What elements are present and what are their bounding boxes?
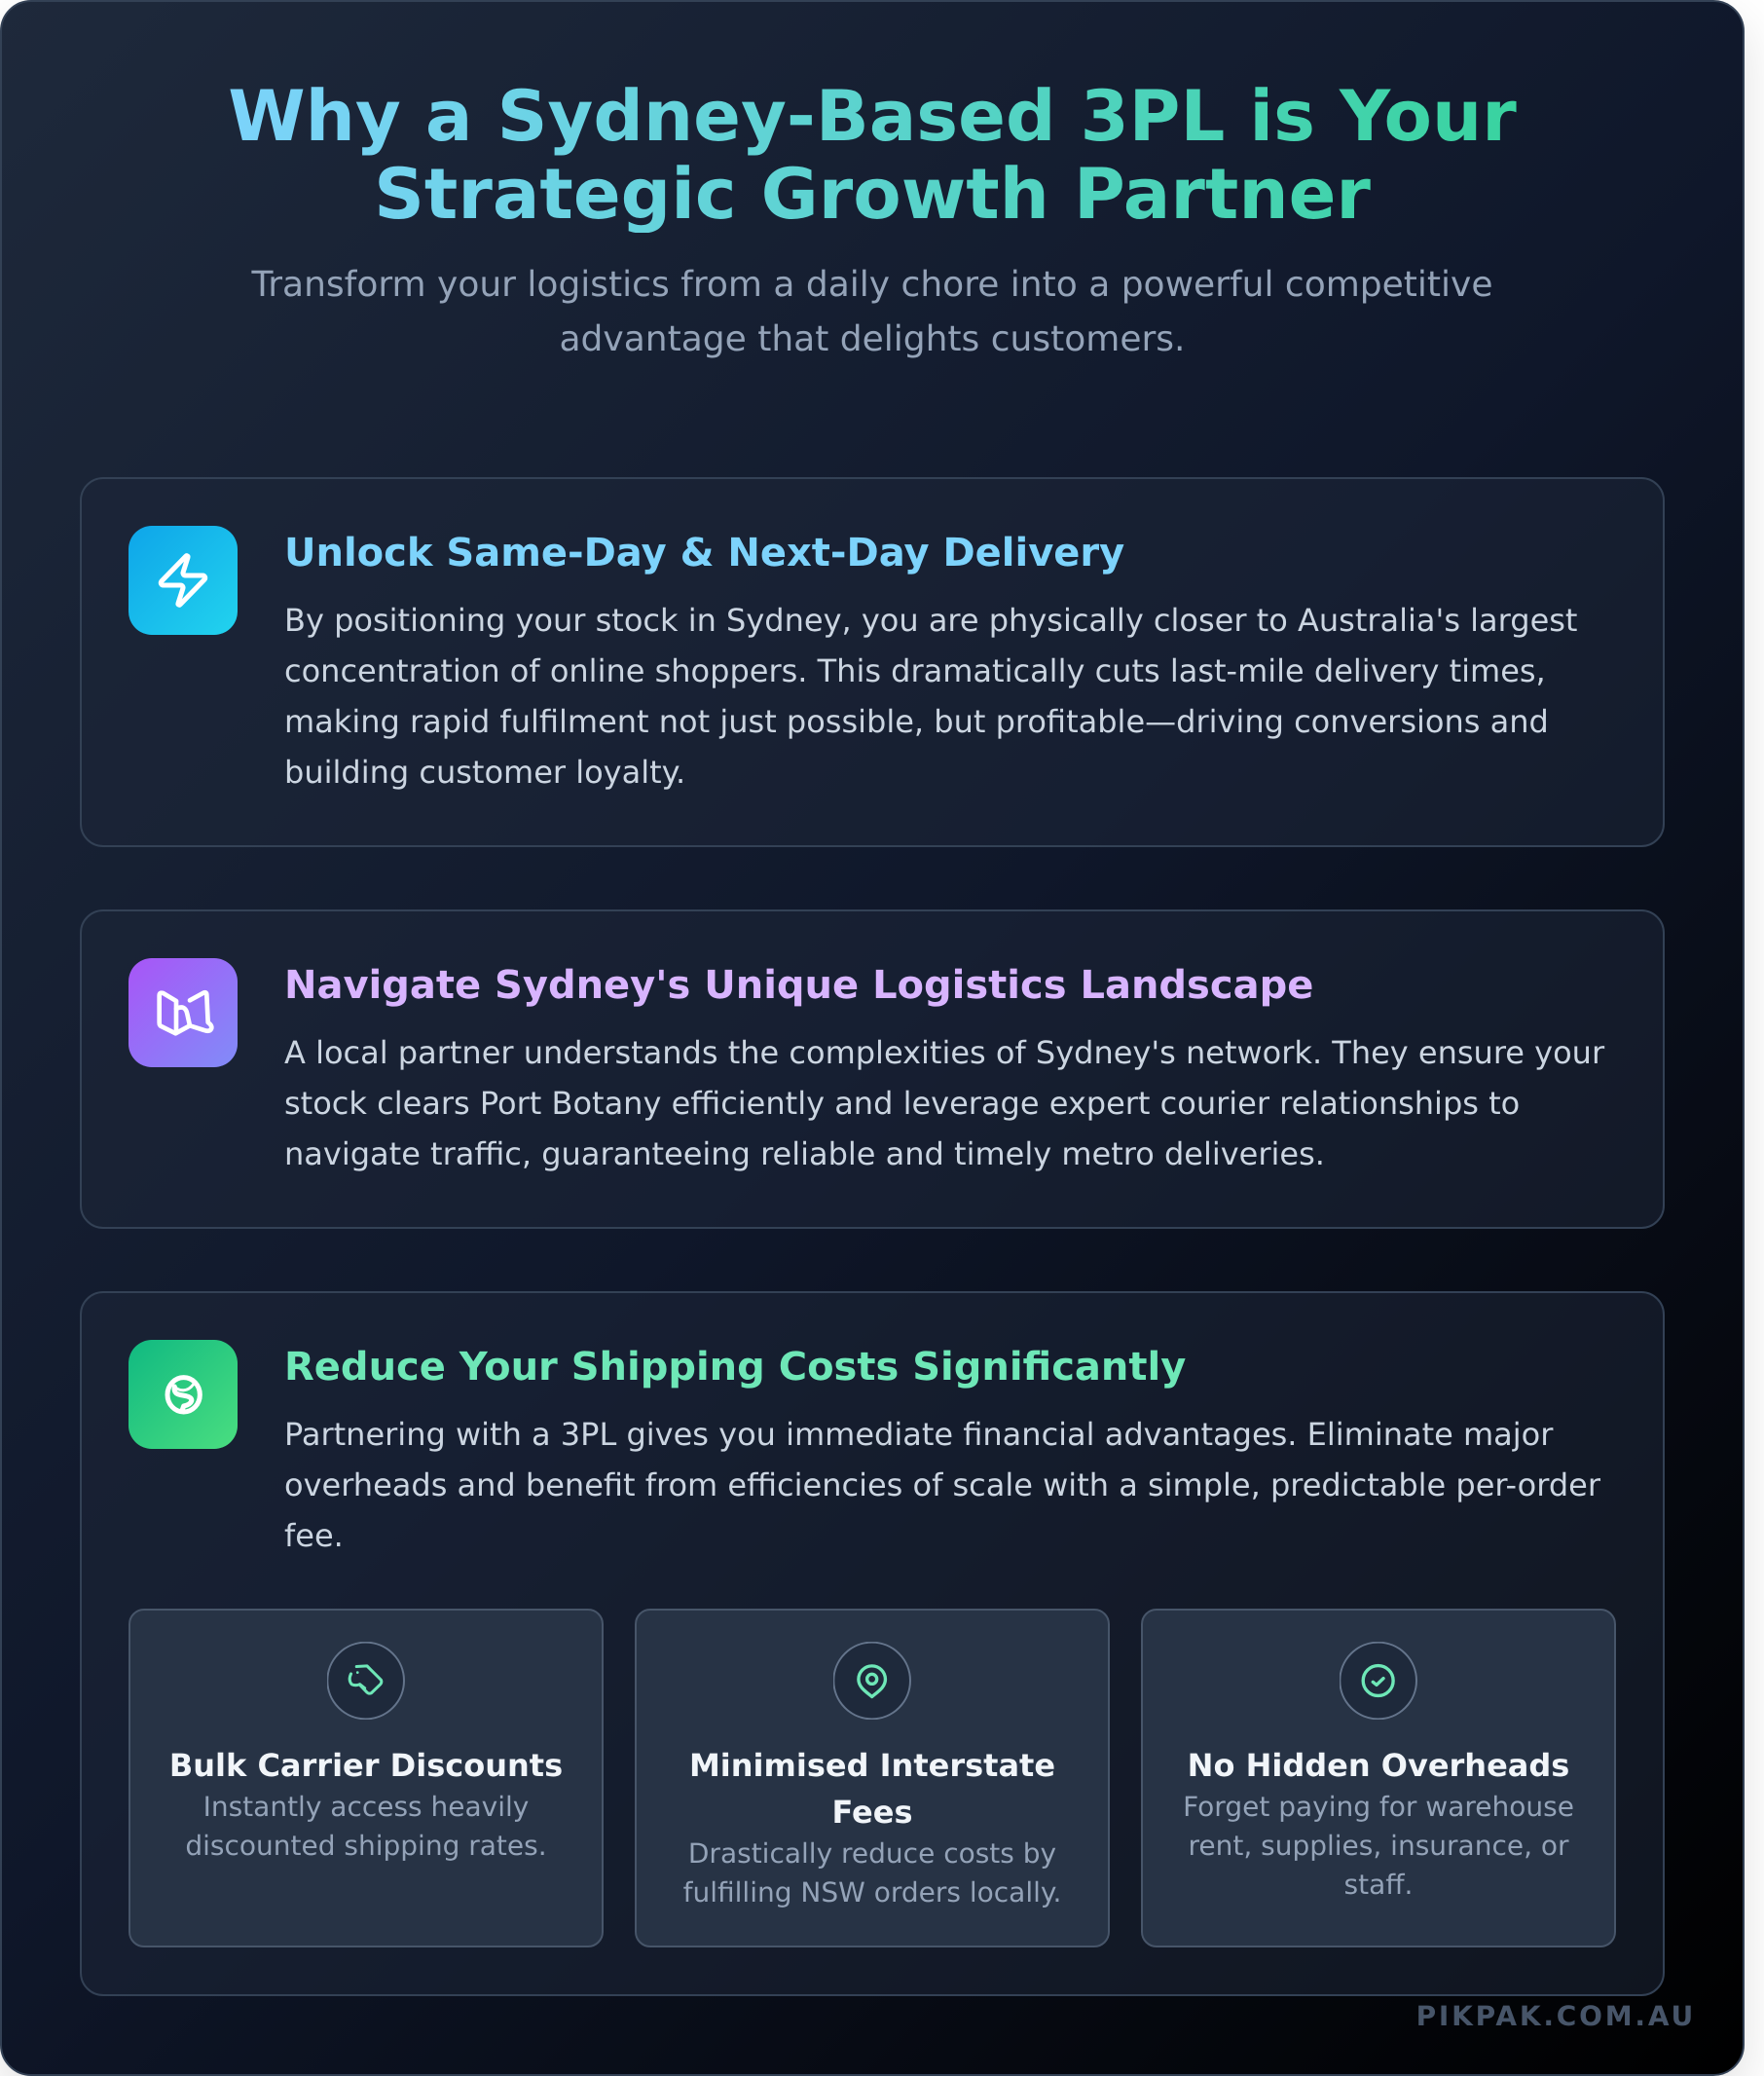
benefit title: No Hidden Overheads	[1188, 1747, 1569, 1784]
benefit text: Forget paying for warehouse	[1183, 1791, 1574, 1823]
heading: Navigate Sydney's Unique Logistics Landscape	[284, 963, 1313, 1008]
heading: Reduce Your Shipping Costs Significantly	[284, 1345, 1186, 1390]
icon: circular dollar	[129, 1340, 238, 1449]
body text	[284, 1034, 1604, 1172]
benefit: bulk carrier discounts	[129, 1609, 604, 1947]
body text: building customer loyalty.	[284, 754, 685, 791]
benefit text	[1183, 1791, 1574, 1901]
subtitle	[251, 265, 1492, 359]
body text	[284, 1416, 1600, 1554]
icon: lightning bolt	[129, 526, 238, 635]
body text: making rapid fulfilment not just possible, but profitable—driving conversions and	[284, 703, 1549, 740]
icon: check circle	[1340, 1642, 1417, 1720]
benefit text: staff.	[1344, 1869, 1413, 1901]
benefit title: Bulk Carrier Discounts	[169, 1747, 563, 1784]
body text: stock clears Port Botany efficiently and leverage expert courier relationships to	[284, 1085, 1520, 1122]
body text: Partnering with a 3PL gives you immediate financial advantages. Eliminate major	[284, 1416, 1553, 1453]
body text: fee.	[284, 1517, 344, 1554]
benefit: minimised interstate fees	[635, 1609, 1110, 1947]
body text: By positioning your stock in Sydney, you are physically closer to Australia's largest	[284, 602, 1577, 639]
body text	[284, 602, 1577, 791]
benefit title: Minimised Interstate	[689, 1747, 1055, 1784]
benefit text: Drastically reduce costs by	[688, 1837, 1056, 1870]
panel: same-day delivery	[80, 477, 1665, 847]
body text: A local partner understands the complexities of Sydney's network. They ensure your	[284, 1034, 1604, 1071]
icon: tag	[327, 1642, 405, 1720]
benefit title: Fees	[831, 1794, 913, 1831]
benefit title	[689, 1747, 1055, 1831]
benefit text	[683, 1837, 1061, 1909]
body text: concentration of online shoppers. This dramatically cuts last-mile delivery times,	[284, 652, 1546, 689]
benefit text: discounted shipping rates.	[185, 1830, 547, 1862]
watermark: PIKPAK.COM.AU	[1416, 2000, 1696, 2032]
subtitle: Transform your logistics from a daily chore into a powerful competitive	[252, 265, 1492, 305]
title	[2, 77, 1743, 233]
heading: Unlock Same-Day & Next-Day Delivery	[284, 531, 1124, 575]
panel: shipping costs	[80, 1291, 1665, 1996]
benefit text	[185, 1791, 547, 1862]
benefit: no hidden overheads	[1141, 1609, 1616, 1947]
panel: logistics landscape	[80, 909, 1665, 1229]
subtitle: advantage that delights customers.	[559, 319, 1185, 359]
benefit text: rent, supplies, insurance, or	[1188, 1830, 1569, 1862]
body text: overheads and benefit from efficiencies of scale with a simple, predictable per-order	[284, 1466, 1600, 1503]
benefit text: Instantly access heavily	[203, 1791, 529, 1823]
benefit text: fulfilling NSW orders locally.	[683, 1876, 1061, 1909]
body text: navigate traffic, guaranteeing reliable and timely metro deliveries.	[284, 1135, 1325, 1172]
icon: map pin	[833, 1642, 911, 1720]
icon: map	[129, 958, 238, 1067]
